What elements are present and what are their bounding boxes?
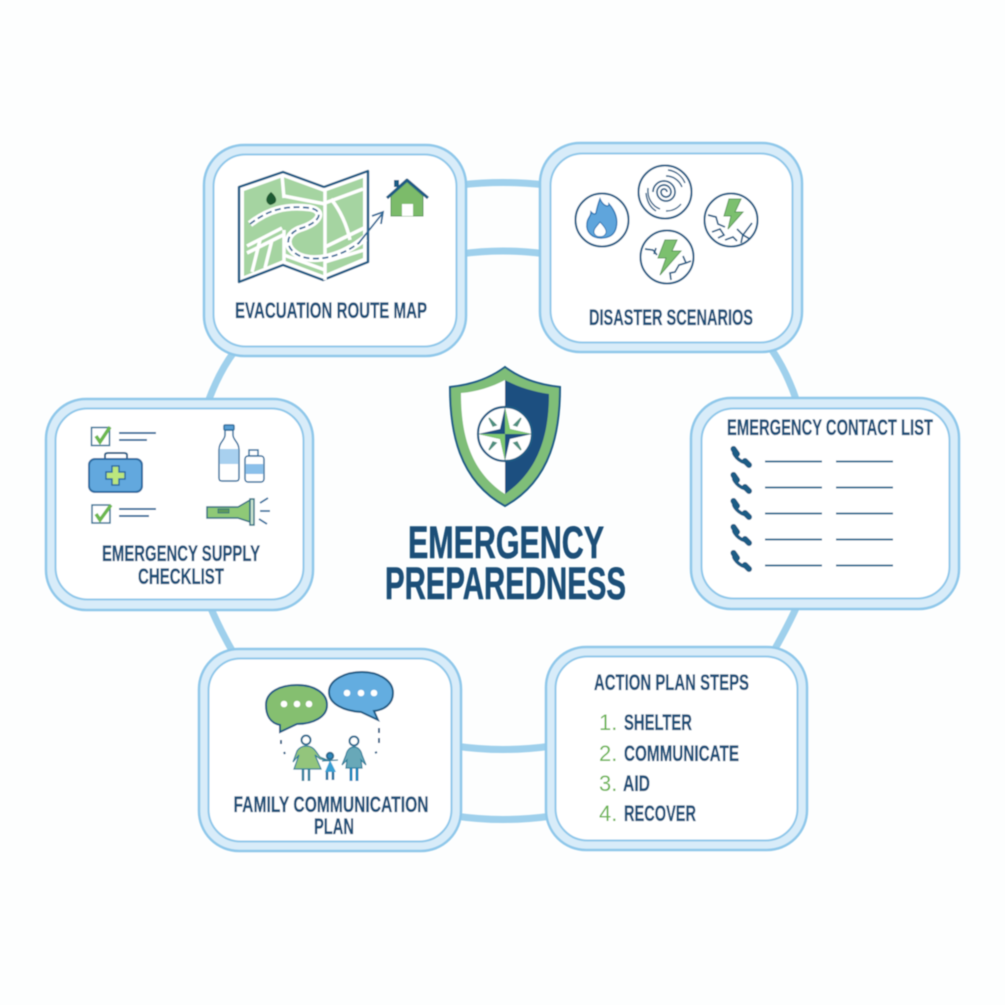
steps list: 2. — [599, 741, 617, 766]
label: emergency supply checklist — [102, 541, 260, 589]
steps list: COMMUNICATE — [624, 741, 739, 766]
panel: emergency supply checklist — [46, 399, 313, 610]
steps list: 4. — [599, 801, 617, 826]
steps list: RECOVER — [624, 801, 696, 826]
steps list: AID — [623, 771, 650, 796]
steps list: 3. — [599, 771, 617, 796]
icon: blue speech bubble — [329, 672, 393, 720]
panel: disaster scenarios — [540, 143, 802, 352]
label: emergency supply checklist: EMERGENCY SUPPLY — [102, 541, 260, 566]
steps list — [599, 710, 739, 826]
icon: flashlight — [207, 498, 270, 525]
icon: tornado spiral — [638, 166, 692, 218]
label: evacuation route map: EVACUATION ROUTE MAP — [235, 298, 427, 323]
connector ring — [208, 182, 797, 820]
steps list: 1. — [599, 710, 617, 735]
icon: checklist item top — [92, 427, 156, 446]
icon: storm damage right — [704, 194, 758, 246]
label: family communication plan: PLAN — [314, 814, 354, 839]
title: PREPAREDNESS — [385, 558, 626, 609]
heading: action plan steps: ACTION PLAN STEPS — [594, 670, 749, 695]
icon: phone rows and lines — [734, 449, 893, 569]
icon: house — [387, 180, 428, 216]
panel: family communication plan — [199, 649, 461, 851]
panel: emergency contact list — [691, 398, 959, 609]
panel: evacuation route map — [204, 145, 466, 356]
icon: first aid kit — [89, 453, 142, 492]
label: family communication plan: FAMILY COMMUNICATION — [234, 792, 428, 817]
label: family communication plan — [234, 792, 428, 839]
icon: checklist item bottom — [92, 505, 156, 523]
icon: water bottles — [219, 425, 264, 482]
steps list: SHELTER — [624, 710, 692, 735]
icon: folded map — [239, 171, 383, 282]
icon: fire — [576, 194, 628, 246]
title: EMERGENCY — [408, 517, 604, 568]
icon: compass shield — [450, 367, 560, 506]
title — [385, 517, 626, 609]
label: emergency supply checklist: CHECKLIST — [138, 564, 224, 589]
label: disaster scenarios: DISASTER SCENARIOS — [589, 305, 753, 330]
icon: family figures — [281, 728, 379, 781]
icon: green speech bubble — [266, 685, 327, 732]
icon: earthquake lightning — [640, 230, 694, 284]
panel: action plan steps — [546, 647, 807, 850]
